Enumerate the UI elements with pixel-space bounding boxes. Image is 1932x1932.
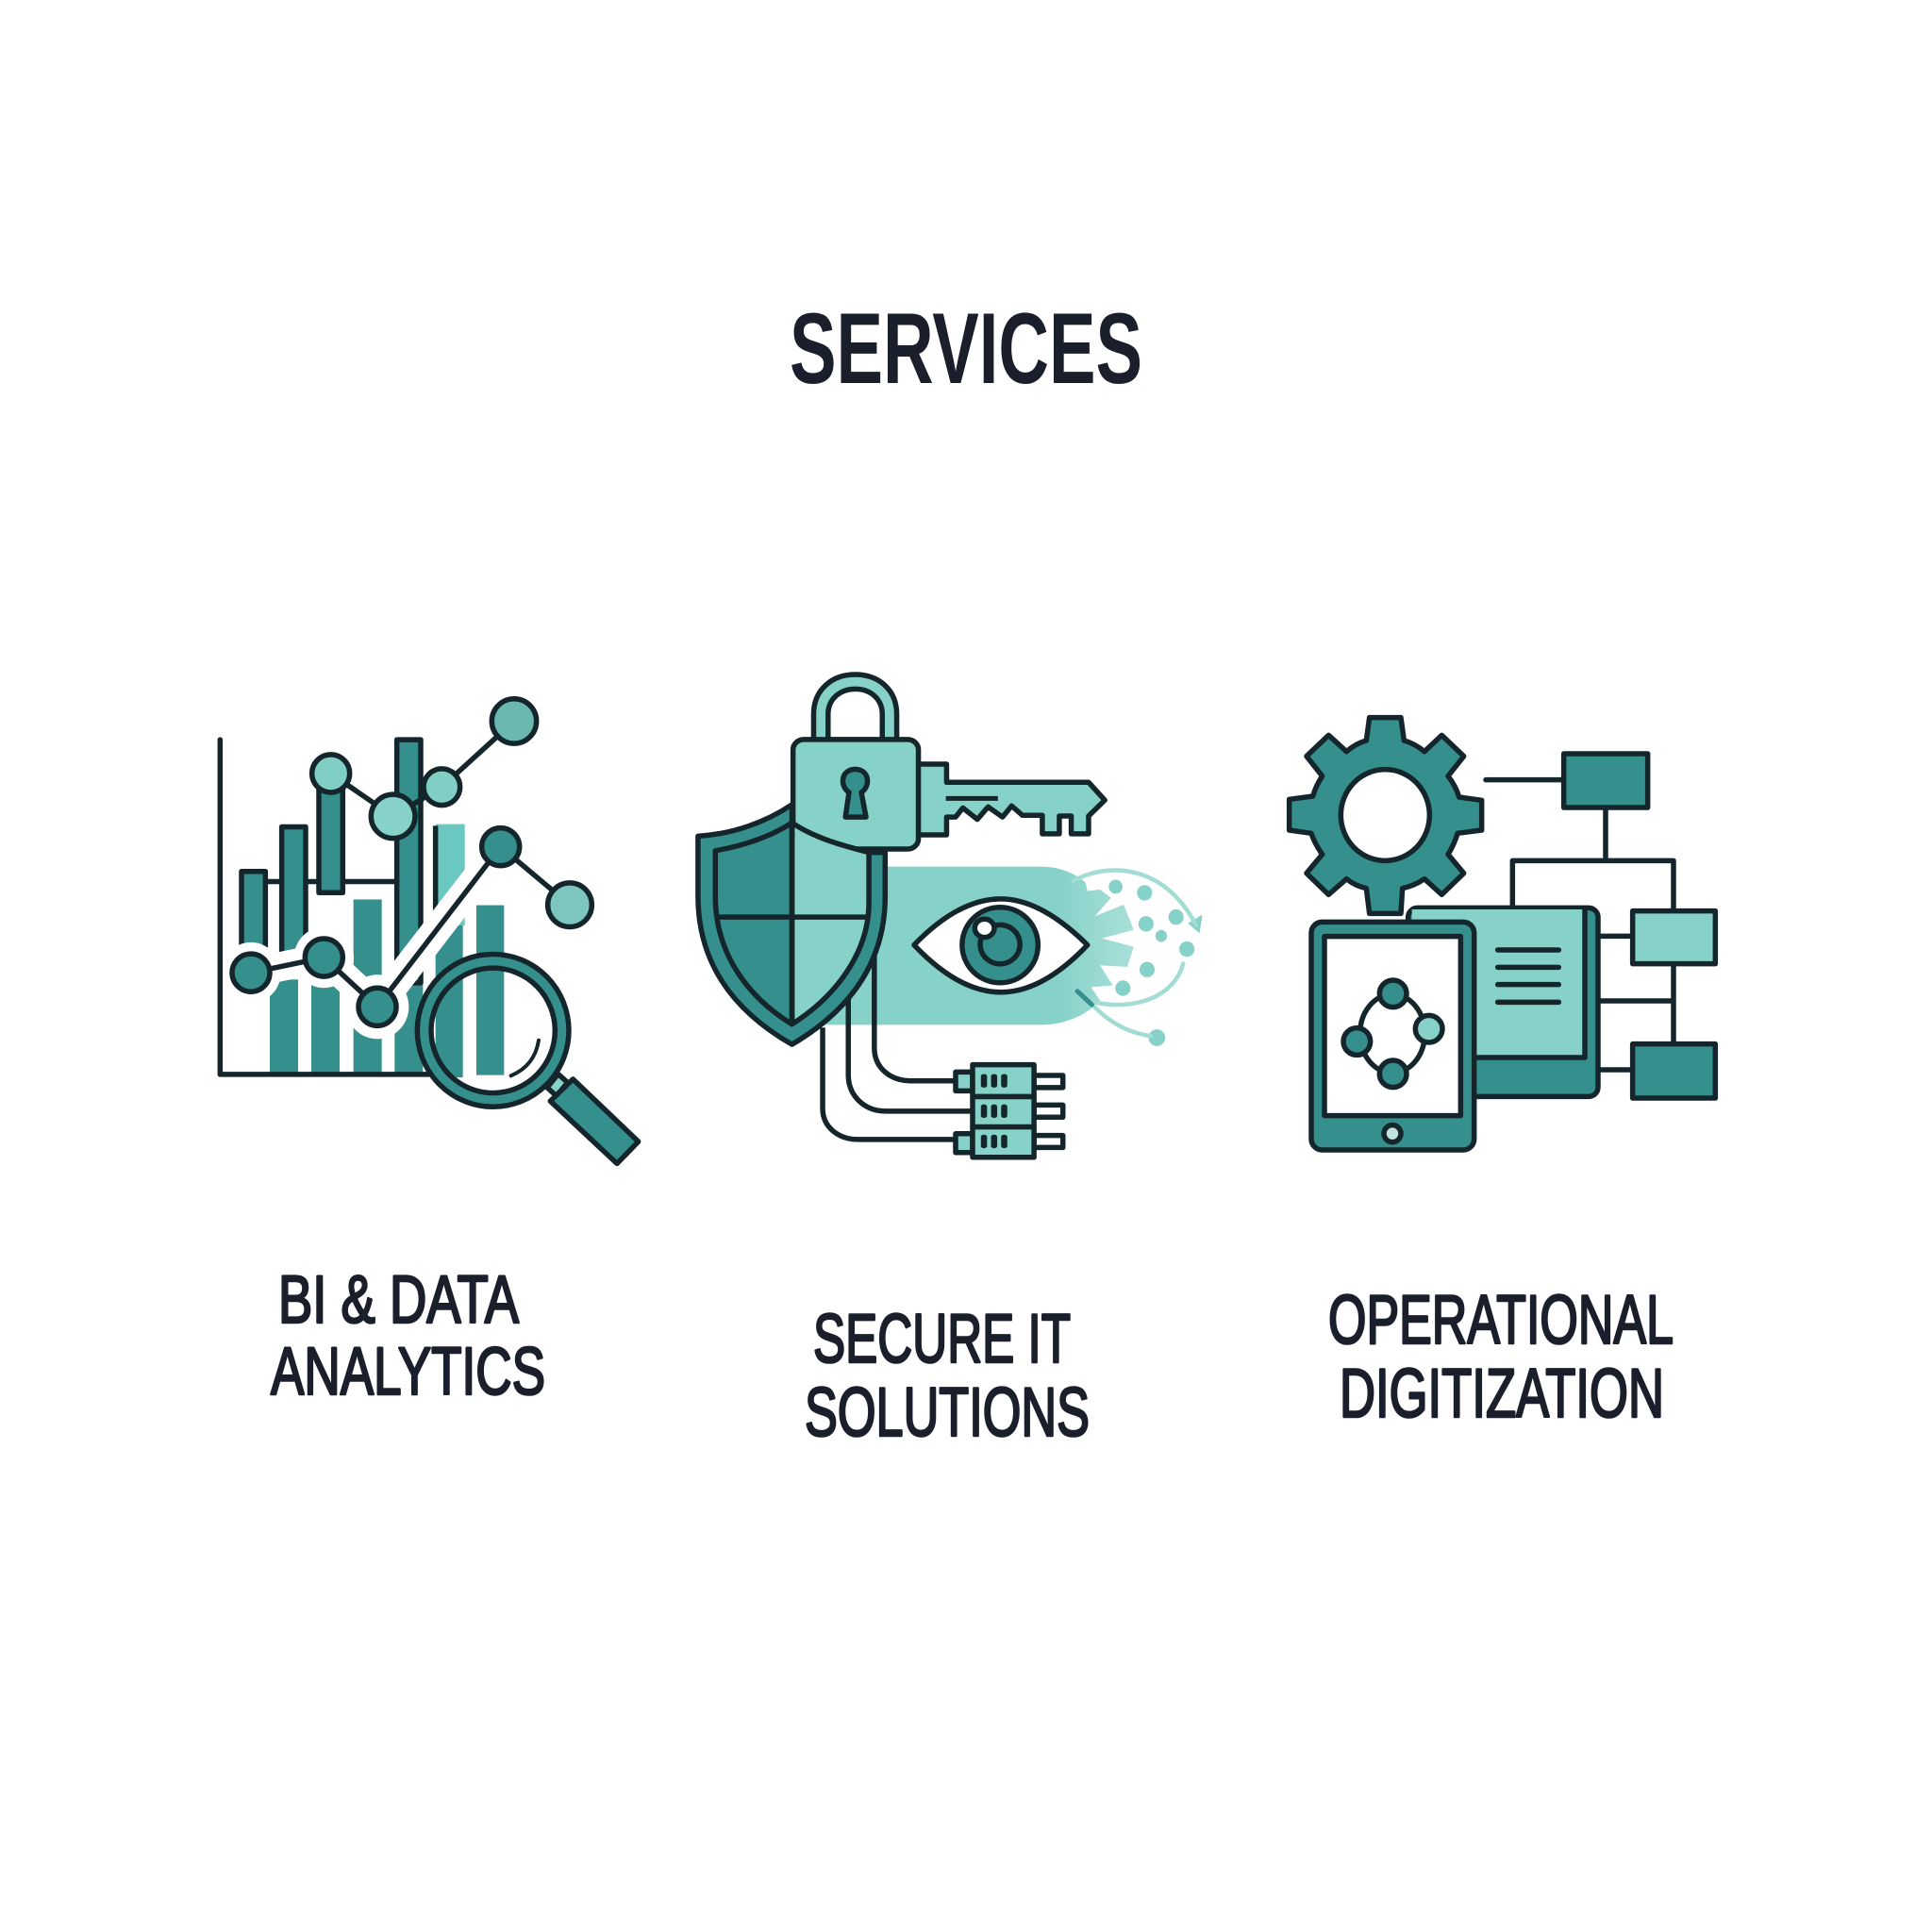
icon: magnifying glass [417, 954, 639, 1163]
flowchart connectors [1486, 780, 1674, 1070]
label: BI & Data Analytics: BI & DATA [278, 1263, 519, 1338]
label: BI & Data Analytics [271, 1263, 545, 1409]
title: SERVICES [790, 291, 1142, 405]
icon: gear [1290, 718, 1482, 913]
icon: tablet [1311, 922, 1474, 1150]
upper trend line [312, 699, 537, 839]
label: BI & Data Analytics: ANALYTICS [271, 1335, 545, 1409]
icon: server stack [956, 1065, 1063, 1158]
icon: key [910, 764, 1105, 835]
panel: operational digitization icon [1290, 718, 1715, 1150]
icon: document [1408, 908, 1598, 1096]
label: Secure IT Solutions: SOLUTIONS [805, 1374, 1090, 1451]
icon: shield [698, 805, 885, 1044]
icon: padlock [793, 675, 919, 849]
label: Operational Digitization: DIGITIZATION [1340, 1356, 1664, 1432]
lower trend line [232, 828, 591, 1025]
panel: BI and data analytics icon [220, 699, 639, 1163]
cables [823, 950, 974, 1140]
flowchart box bottom [1633, 1044, 1715, 1098]
label: Secure IT Solutions [805, 1301, 1090, 1451]
label: Operational Digitization [1328, 1282, 1674, 1432]
icon: eye [914, 899, 1088, 992]
light bar [436, 824, 465, 927]
dissolving particles and arcs [1073, 871, 1203, 1046]
lower bars [270, 899, 504, 1077]
highlight pill with dissolving edge [824, 867, 1134, 1024]
chart axes [220, 740, 431, 1074]
label: Secure IT Solutions: SECURE IT [813, 1301, 1071, 1377]
panel: secure IT solutions icon [698, 675, 1203, 1158]
connecting rule [265, 879, 397, 884]
label: Operational Digitization: OPERATIONAL [1328, 1282, 1674, 1358]
upper bars [242, 740, 421, 983]
flowchart box top [1564, 754, 1648, 808]
white halo behind trend line [221, 847, 501, 1039]
flowchart box middle [1633, 911, 1715, 964]
